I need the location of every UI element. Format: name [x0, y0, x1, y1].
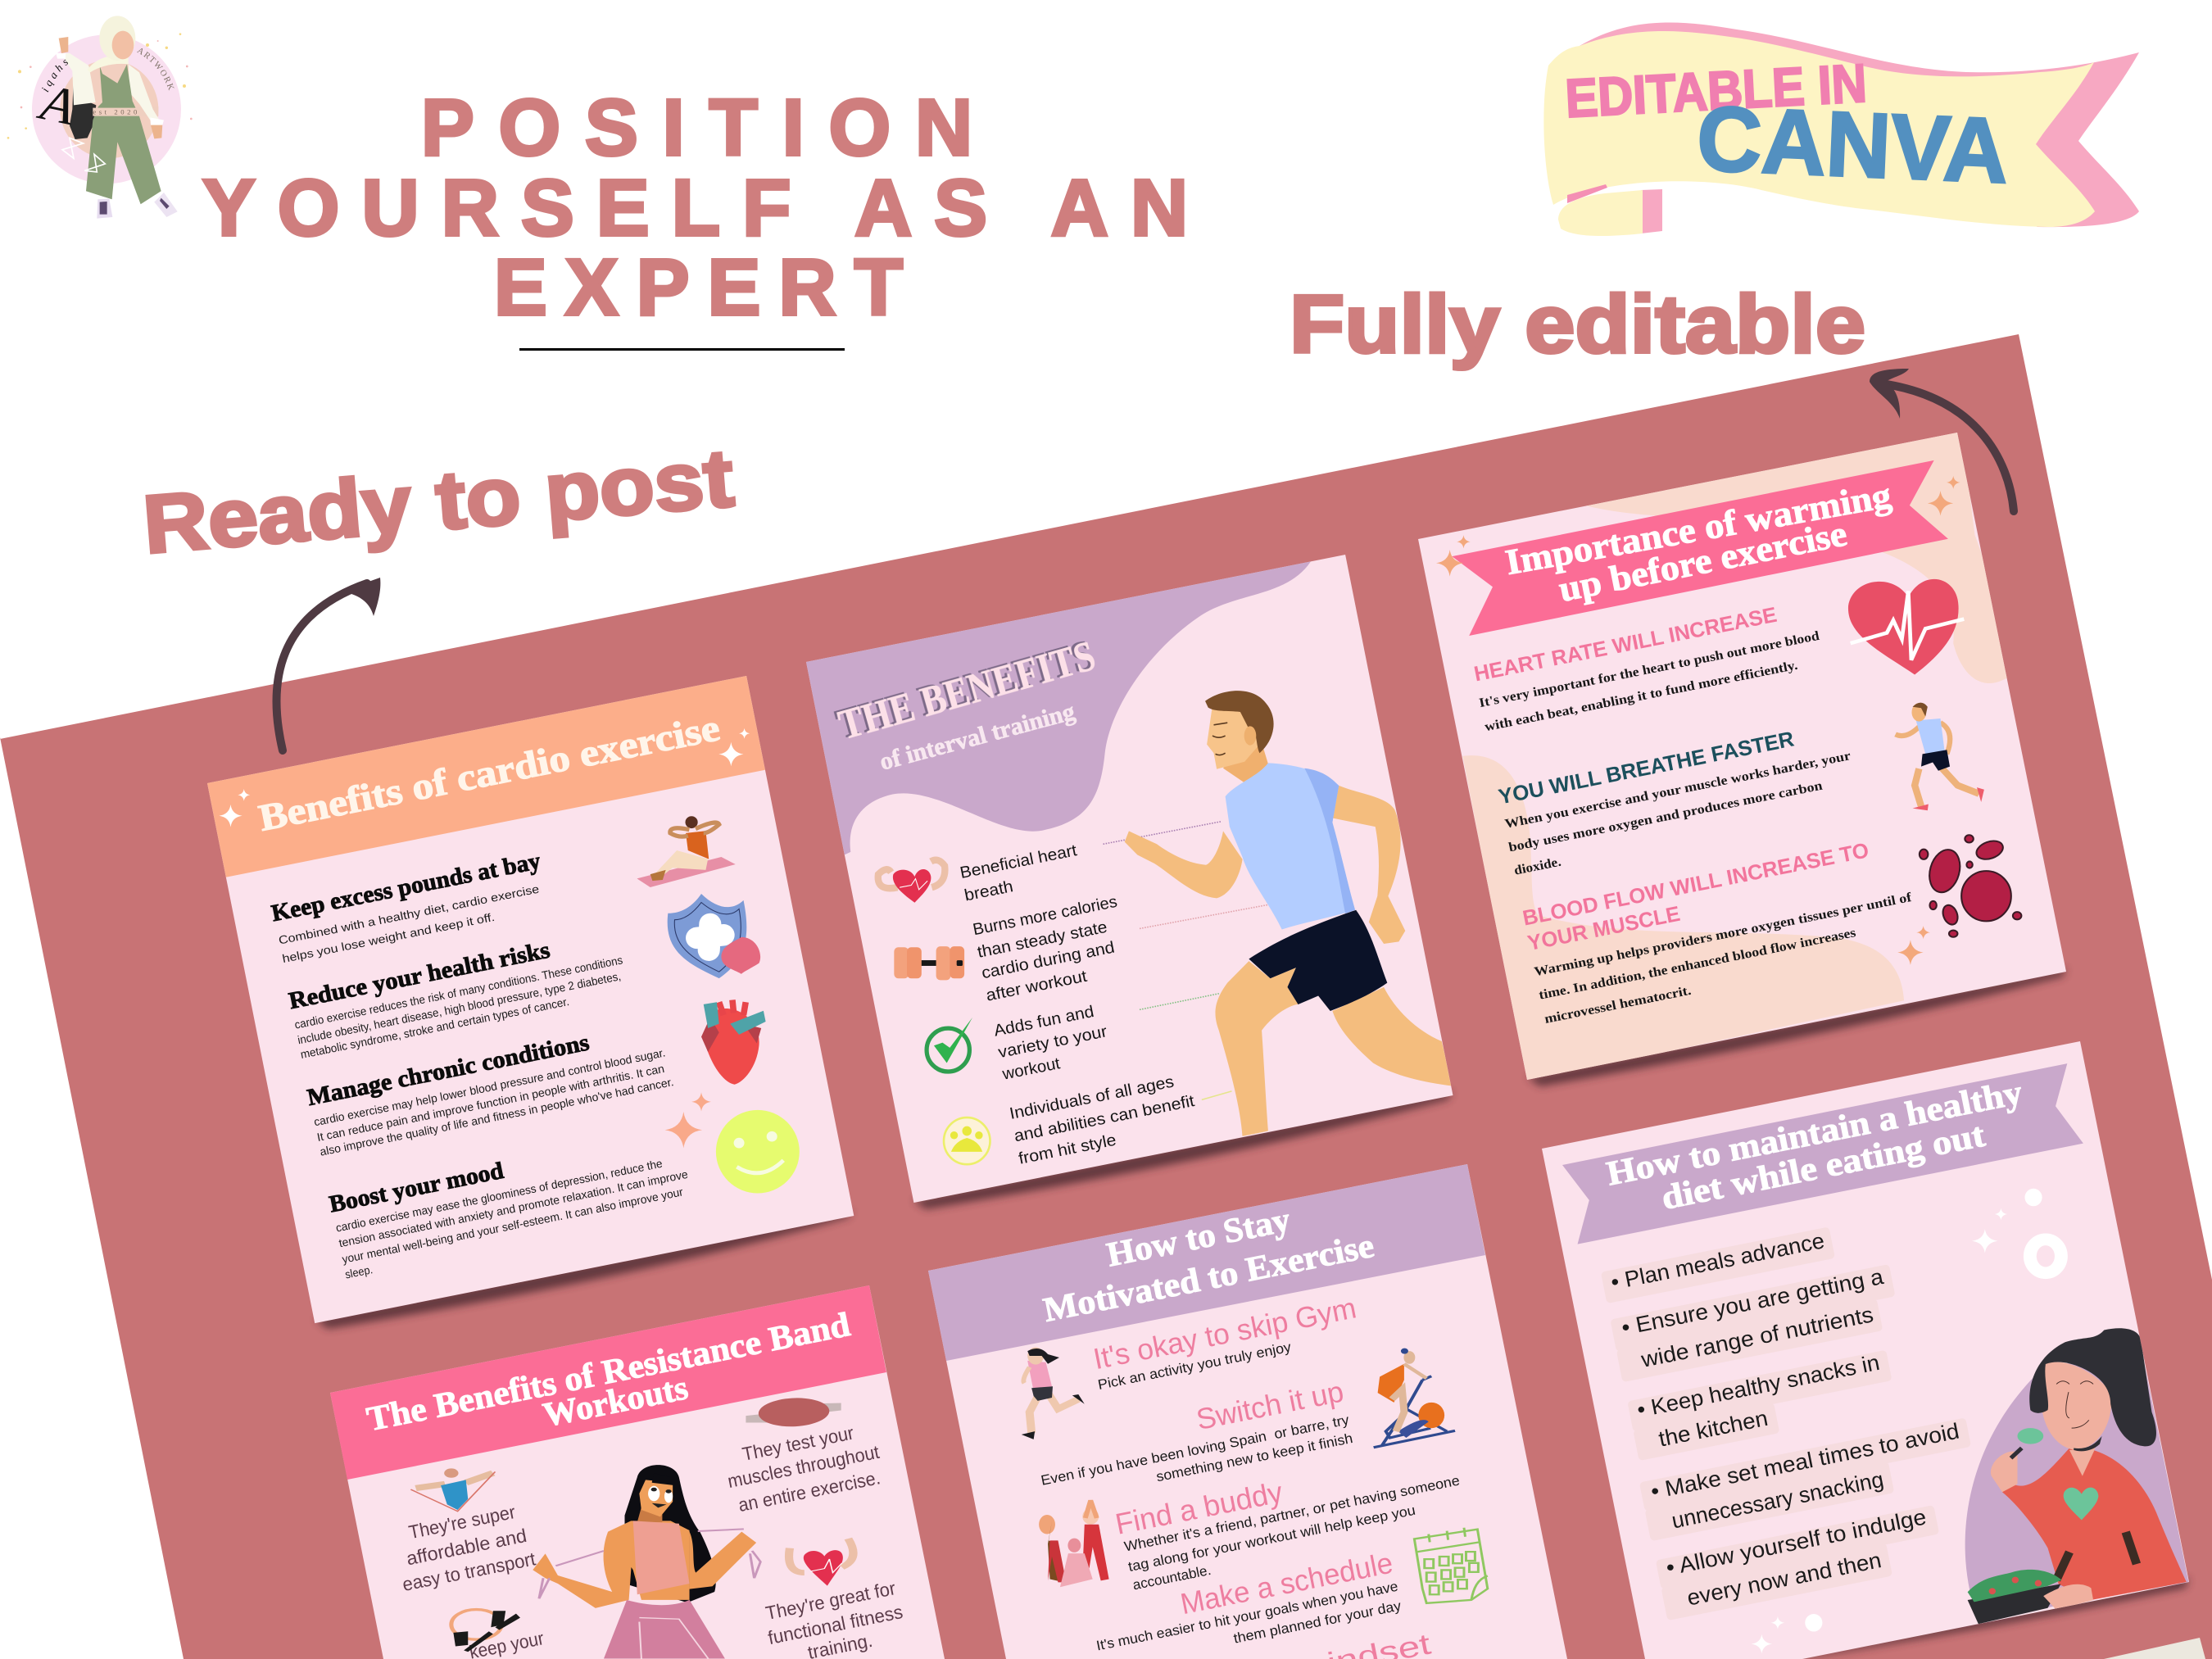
benefit list: breath [963, 877, 1015, 905]
card title: up before exercise [1556, 513, 1850, 610]
section: breathing: dioxide. [1513, 855, 1562, 878]
section: blood flow: microvessel hematocrit. [1543, 984, 1693, 1027]
tip: find a buddy: Find a buddy [1113, 1475, 1285, 1541]
icon: heart with arms [878, 860, 945, 903]
icon: man with band [410, 1468, 495, 1512]
icon: check mark [927, 1018, 972, 1072]
card title: The Benefits of Resistance Band [364, 1306, 853, 1439]
bullet list [1607, 1210, 1983, 1613]
ribbon [1452, 460, 1948, 636]
benefit list [959, 828, 1201, 1168]
icon: health shield [668, 894, 760, 978]
benefit: health risks: Reduce your health risks [287, 937, 552, 1014]
benefit list: and abilities can benefit [1013, 1092, 1196, 1145]
tip: make a schedule [1089, 1545, 1403, 1659]
logo jumpsuit [86, 64, 161, 204]
tip: find a buddy: Whether it's a friend, partner, or pet having someone [1123, 1472, 1461, 1555]
benefit text: affordable: affordable and [405, 1525, 528, 1569]
benefit list: cardio during and [980, 938, 1116, 982]
benefit text: functional fitness [761, 1577, 909, 1659]
section: heart rate: HEART RATE WILL INCREASE [1472, 602, 1779, 687]
benefit: chronic conditions: It can reduce pain and improve function in people with arthritis. It can [315, 1062, 665, 1144]
benefit list: Individuals of all ages [1008, 1072, 1176, 1123]
ribbon [1562, 1063, 2083, 1244]
icon: heart with arms [789, 1539, 853, 1586]
card title [1032, 1186, 1377, 1330]
icon: muscle [746, 1396, 841, 1429]
icon: calendar [1414, 1528, 1488, 1603]
tip: find a buddy [1113, 1440, 1469, 1594]
benefit list: Beneficial heart [959, 841, 1079, 882]
card title [1603, 1074, 2033, 1227]
card title: Workouts [540, 1369, 691, 1435]
tip: skip gym: It's okay to skip Gym [1090, 1290, 1359, 1376]
icon: woman running [1022, 1347, 1085, 1439]
card title: Importance of warming [1503, 475, 1894, 582]
panel: how to stay motivated [928, 1164, 1567, 1659]
tip: make a schedule: Make a schedule [1177, 1546, 1395, 1620]
tip: make a schedule: It's much easier to hit your goals when you have [1095, 1579, 1399, 1654]
card title: How to Stay [1104, 1201, 1294, 1275]
section: breathing: When you exercise and your muscle works harder, your [1503, 749, 1852, 832]
card title: Motivated to Exercise [1040, 1227, 1377, 1330]
benefit text: muscle test: muscles throughout [726, 1441, 882, 1492]
benefit: mood: cardio exercise may ease the gloominess of depression, reduce the [334, 1157, 664, 1235]
title: POSITION [421, 83, 972, 172]
panel: the benefits of interval training [806, 555, 1453, 1209]
section: heart rate: with each beat, enabling it to fund more efficiently. [1484, 659, 1799, 734]
label: fully editable: Fully editable [1290, 279, 1865, 370]
benefit: mood [327, 1122, 696, 1281]
benefit list: than steady state [976, 918, 1108, 962]
benefit: chronic conditions: cardio exercise may help lower blood pressure and control blood sugar. [313, 1045, 666, 1128]
section: heart rate: It's very important for the heart to push out more blood [1478, 629, 1820, 710]
card heading: THE BENEFITS [834, 632, 1100, 750]
benefit: chronic conditions: also improve the quality of life and fitness in people who've had cancer. [319, 1075, 675, 1158]
benefit: health risks: include obesity, heart disease, high blood pressure, type 2 diabetes, [297, 969, 622, 1046]
benefit list: after workout [985, 968, 1089, 1005]
card header band [330, 1285, 886, 1480]
benefit: pounds [270, 848, 551, 965]
bullet list: every now and then [1685, 1548, 1883, 1611]
logo: illustrated woman with circular badge [7, 16, 193, 218]
benefit: chronic conditions: Manage chronic conditions [305, 1029, 592, 1111]
bullet highlights [1598, 1208, 1993, 1620]
icon: heart rate [1848, 579, 1964, 674]
logo right arm [129, 64, 161, 123]
bullet list: wide range of nutrients [1639, 1302, 1875, 1372]
icon: smiley [716, 1110, 800, 1193]
dotted lines [1104, 822, 1221, 844]
tip: find a buddy: tag along for your workout will help keep you [1126, 1503, 1416, 1575]
icon: anatomical heart [701, 1000, 766, 1085]
logo script initial: A [33, 73, 80, 136]
bullet list: • Ensure you are getting a [1620, 1264, 1886, 1340]
decorative shapes [1752, 1189, 2061, 1653]
lilac wave [806, 561, 1352, 869]
illustration: woman eating salad [1965, 1328, 2188, 1624]
benefit list: from hit style [1017, 1131, 1117, 1168]
benefit text: functional fitness: They're great for [764, 1577, 898, 1624]
title: EXPERT [494, 243, 903, 332]
panel: healthy diet while eating out [1542, 1041, 2189, 1659]
section: breathing [1496, 716, 1861, 878]
benefit text: affordable: easy to transport [401, 1548, 537, 1595]
benefit list: Burns more calories [972, 893, 1119, 939]
peach blobs [1584, 430, 2009, 683]
card title: How to maintain a healthy [1603, 1074, 2025, 1194]
icon: woman doing sit-ups [637, 816, 736, 887]
title: YOURSELF AS AN [202, 163, 1188, 252]
background tilted panel [0, 334, 2212, 1659]
card title: diet while eating out [1658, 1117, 1988, 1217]
card subheading: of interval training [877, 698, 1078, 776]
tip: switch it up: Even if you have been loving Spain or barre, try [1040, 1412, 1351, 1489]
benefit: chronic conditions [305, 1014, 675, 1158]
section: heart rate [1471, 595, 1825, 735]
benefit text: affordable [391, 1498, 537, 1595]
tip: switch it up: something new to keep it finish [1155, 1430, 1354, 1484]
card sparkles and icons [219, 728, 800, 1193]
benefit: health risks: metabolic syndrome, stroke and certain types of cancer. [299, 995, 570, 1061]
panel: resistance band workouts [330, 1285, 945, 1659]
bullet list: unnecessary snacking [1670, 1467, 1886, 1533]
logo artwork text: ARTWORK [136, 48, 174, 90]
icon: dumbbell [894, 946, 964, 980]
benefit: pounds: helps you lose weight and keep it off. [281, 910, 496, 965]
bullet list: • Make set meal times to avoid [1648, 1419, 1961, 1504]
benefit: mood: your mental well-being and your self-esteem. It can also improve your [341, 1185, 684, 1266]
section: breathing: YOU WILL BREATHE FASTER [1496, 726, 1796, 809]
benefit: health risks [287, 923, 630, 1061]
bullet list: • Keep healthy snacks in [1635, 1350, 1882, 1422]
card header band [207, 676, 765, 877]
card header band [928, 1164, 1485, 1361]
benefit: pounds: Combined with a healthy diet, cardio exercise [278, 882, 541, 947]
benefit: mood: Boost your mood [327, 1158, 505, 1217]
benefit list: workout [1000, 1054, 1062, 1084]
benefit: mood: tension associated with anxiety and promote relaxation. It can improve [338, 1167, 689, 1249]
section: blood flow [1521, 831, 1923, 1027]
tip: find a buddy: accountable. [1131, 1562, 1213, 1593]
banner: editable in Canva: EDITABLE IN [1564, 52, 1868, 129]
title underline [519, 348, 845, 351]
icon: blood cells [1920, 835, 2021, 937]
logo left arm [59, 37, 68, 53]
label: ready to post: Ready to post [140, 432, 737, 571]
next card corner [2104, 1638, 2205, 1659]
section: breathing: body uses more oxygen and produces more carbon [1507, 779, 1824, 854]
benefit: mood: sleep. [344, 1262, 374, 1281]
panel: importance of warming up [1418, 430, 2066, 1086]
tip: switch it up: Switch it up [1194, 1374, 1346, 1436]
icon: band handles [451, 1610, 520, 1652]
banner: editable in Canva [1543, 22, 2139, 236]
title [202, 83, 1188, 332]
banner: editable in Canva: CANVA [1695, 87, 2010, 202]
tip: skip gym: Pick an activity you truly enjoy [1096, 1339, 1293, 1393]
section: blood flow: Warming up helps providers more oxygen tissues per until of [1533, 891, 1913, 979]
benefit text: affordable: They're super [407, 1501, 517, 1543]
logo est text: est 2020 [93, 107, 137, 116]
card title [1502, 467, 1901, 619]
section: blood flow: YOUR MUSCLE [1525, 901, 1682, 955]
logo script name: iqahs [42, 59, 68, 93]
benefit text: muscle test [721, 1417, 886, 1516]
benefit text: functional fitness: functional fitness [766, 1601, 904, 1648]
tip: switch it up [1032, 1374, 1354, 1507]
benefit list: Adds fun and [992, 1003, 1095, 1040]
tip: make a schedule: them planned for your day [1232, 1598, 1403, 1647]
logo shoes [97, 199, 112, 219]
logo scarf and head [88, 55, 129, 72]
bullet list: • Plan meals advance [1609, 1228, 1826, 1294]
illustration: running man [1125, 691, 1453, 1136]
illustration: woman with resistance band [533, 1465, 760, 1659]
bullet list: • Allow yourself to indulge [1664, 1504, 1929, 1580]
panel: benefits of cardio exercise [207, 676, 854, 1329]
benefit: health risks: cardio exercise reduces the risk of many conditions. These conditions [293, 953, 623, 1031]
card title: Benefits of cardio exercise [256, 706, 723, 839]
logo bag [70, 70, 96, 139]
arrow: up to ready to post [276, 578, 380, 750]
benefit text: muscle test: They test your [741, 1421, 856, 1465]
logo stars [62, 138, 105, 172]
benefit text: muscle test: an entire exercise. [737, 1466, 882, 1516]
arrow: up to fully editable [1870, 369, 2014, 511]
benefit list: variety to your [997, 1022, 1109, 1062]
icon: three women [1039, 1500, 1109, 1587]
section: blood flow: time. In addition, the enhanced blood flow increases [1538, 926, 1857, 1003]
icon: woman on exercise bike [1374, 1349, 1455, 1448]
icon: group circle [944, 1117, 990, 1164]
bullet list: the kitchen [1657, 1406, 1770, 1452]
benefit: pounds: Keep excess pounds at bay [270, 848, 543, 927]
icon: small runner [1896, 703, 1984, 810]
section: blood flow: BLOOD FLOW WILL INCREASE TO [1521, 837, 1871, 931]
